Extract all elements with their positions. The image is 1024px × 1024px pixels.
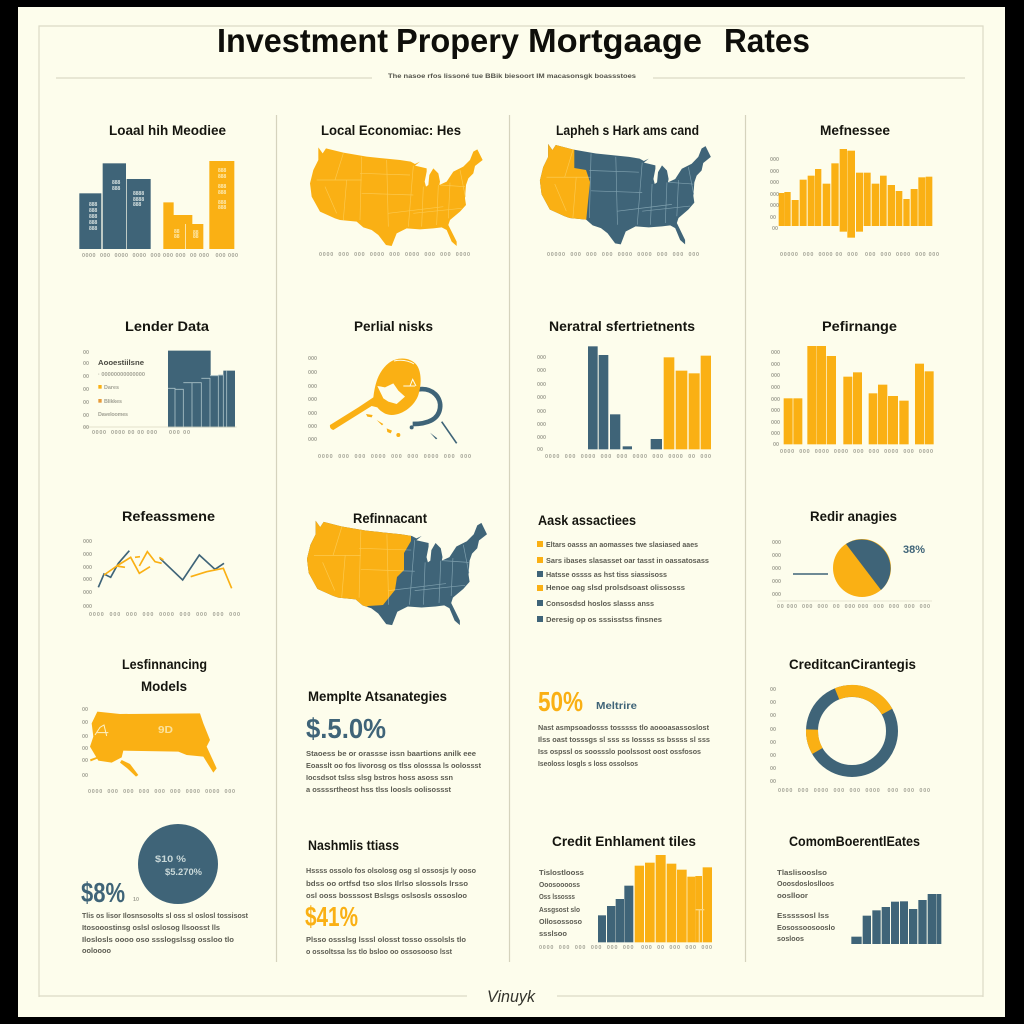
panel: nashmlis tiass xyxy=(305,838,476,956)
y axis labels: 000 xyxy=(537,368,546,374)
body text: Iocsdsot tslss slsg bstros hoss asoss ssn xyxy=(306,773,453,782)
body text: Nast asmpsoadosss tosssss tlo aoooasassoslost xyxy=(538,723,710,732)
legend: Aooestiilsne xyxy=(98,358,144,367)
heading: Mefnessee xyxy=(820,123,890,138)
bar chart: 88 xyxy=(174,229,180,235)
x axis labels: 0000 000 000 000 000 000 0000 0000 000 xyxy=(88,789,235,795)
heading: CreditcanCirantegis xyxy=(789,657,916,672)
circle badge: $10 % xyxy=(155,854,187,865)
side labels xyxy=(539,868,584,938)
body text: Itosooostinsg oslsl oslosog llsoosst lls xyxy=(82,923,220,932)
bar chart xyxy=(779,149,932,238)
x axis labels: 0000 000 000 0000 000 000 0000 000 000 xyxy=(318,454,471,460)
body text lower: o ossoltssa lss tlo bsloo oo ossosooso lsst xyxy=(306,947,453,956)
side labels: sosloos xyxy=(777,934,804,943)
signature: Vinuyk xyxy=(487,987,536,1006)
bar chart xyxy=(784,346,934,444)
bar chart xyxy=(598,855,712,942)
side labels: Ollosossoso xyxy=(539,917,582,926)
y axis labels: 000 xyxy=(537,395,546,401)
x axis labels: 0000 000 000 000 000 000 000 00 000 000 000 xyxy=(539,945,712,951)
y axis labels: 000 xyxy=(771,373,780,379)
y axis labels: 00 xyxy=(770,740,776,746)
legend xyxy=(98,358,145,418)
panel: west and east map xyxy=(540,123,711,258)
x axis labels: 0000 000 0000 000 000 0000 000 000 000 xyxy=(778,788,930,794)
heading: Neratral sfertrietnents xyxy=(549,319,695,334)
bar chart: 8888 xyxy=(133,191,144,197)
x axis labels: 00 000 000 000 00 000 000 000 000 000 000 xyxy=(777,604,930,610)
side labels xyxy=(777,868,835,943)
y axis labels: 000 xyxy=(537,355,546,361)
small note: 10 xyxy=(133,897,139,903)
y axis labels: 000 xyxy=(83,552,92,558)
heading: Refeassmene xyxy=(122,509,216,524)
body text: osl ooss bosssost Bslsgs oslsosls ossosloo xyxy=(306,891,467,900)
y axis labels: 00 xyxy=(770,779,776,785)
panel: peril risks xyxy=(308,319,471,460)
big number: $41% xyxy=(305,901,358,932)
heading: Loaal hih Meodiee xyxy=(109,123,226,138)
y axis labels: 00 xyxy=(770,215,776,221)
y axis labels: 00 xyxy=(82,734,88,740)
bar chart: 88 xyxy=(174,234,180,240)
x axis labels: 0000 000 000 000 0000 000 000 000 000 xyxy=(89,612,240,618)
heading: Redir anagies xyxy=(810,509,897,524)
body text: Iseoloss losgls s loss ossolsos xyxy=(538,759,638,768)
y axis labels: 000 xyxy=(537,409,546,415)
map value: 9D xyxy=(158,725,173,736)
body text: bdss oo ortfsd tso slos Ilrlso slossols lrsso xyxy=(306,879,469,888)
panel: performance xyxy=(771,319,934,455)
x axis labels: 00000 000 0000 00 000 000 000 0000 000 000 xyxy=(780,252,939,258)
panel: rate circle xyxy=(81,824,248,955)
x axis labels: 0000 000 0000 0000 000 000 000 00 000 000 000 xyxy=(82,253,238,259)
y axis labels: 000 xyxy=(770,180,779,186)
pie chart xyxy=(833,539,891,597)
body text lower: Plsso ossslsg lsssl olosst tosso ossolsls tlo xyxy=(306,935,466,944)
map: amber west and navy east USA xyxy=(307,521,487,625)
y axis labels: 000 xyxy=(772,592,781,598)
legend: Dares xyxy=(104,385,119,391)
y axis labels: 000 xyxy=(770,169,779,175)
y axis labels: 00 xyxy=(770,700,776,706)
heading: Refinnacant xyxy=(353,511,427,526)
body text xyxy=(82,911,248,955)
body text: Iloslosls oooo oso ssslogslssg ossloo tlo xyxy=(82,935,234,944)
heading line 2: Models xyxy=(141,679,187,694)
bullet list: Henoe oag slsd prolsdsoast olissosss xyxy=(546,583,685,592)
y axis labels: 00 xyxy=(83,374,89,380)
bar chart xyxy=(588,346,711,449)
panel: pie chart xyxy=(772,509,932,610)
side labels: Esssssosl lss xyxy=(777,911,829,920)
heading: Memplte Atsanategies xyxy=(308,689,447,704)
y axis labels: 000 xyxy=(770,203,779,209)
bar chart: 888 xyxy=(218,205,227,211)
y axis labels: 000 xyxy=(308,397,317,403)
title: Mortgaage xyxy=(528,22,702,59)
bar chart: 888 xyxy=(218,174,227,180)
line chart xyxy=(98,551,232,588)
bar chart: 8888 xyxy=(133,197,144,203)
side labels: Oss lssosss xyxy=(539,892,575,901)
bar chart: 888 xyxy=(133,202,142,208)
y axis labels: 000 xyxy=(772,579,781,585)
bar chart: 888 xyxy=(89,202,98,208)
side labels: Ooosooooss xyxy=(539,880,580,889)
bar chart: 888 xyxy=(89,214,98,220)
y axis labels: 000 xyxy=(308,411,317,417)
panel: ask associates list xyxy=(537,513,709,624)
bar chart: 888 xyxy=(218,200,227,206)
y axis labels: 00 xyxy=(770,727,776,733)
y axis labels: 00 xyxy=(772,226,778,232)
body text xyxy=(306,866,476,900)
y axis labels: 00 xyxy=(82,773,88,779)
icon: magnifying key xyxy=(330,359,457,443)
y axis labels: 000 xyxy=(308,437,317,443)
bullet list: Hatsse ossss as hst tiss siassisoss xyxy=(546,570,667,579)
y axis labels: 00 xyxy=(82,758,88,764)
y axis labels: 000 xyxy=(770,192,779,198)
legend: Daveloomes xyxy=(98,412,128,418)
y axis labels: 00 xyxy=(770,713,776,719)
bar chart: 888 xyxy=(218,168,227,174)
y axis labels: 00 xyxy=(83,350,89,356)
y axis labels: 000 xyxy=(308,370,317,376)
bar chart xyxy=(79,161,234,249)
donut chart xyxy=(812,691,892,771)
y axis labels: 00 xyxy=(83,361,89,367)
circle badge xyxy=(138,824,218,904)
y axis labels: 00 xyxy=(773,442,779,448)
heading: Credit Enhlament tiles xyxy=(552,834,696,849)
y axis labels: 000 xyxy=(771,362,780,368)
bar chart: 88 xyxy=(193,234,199,240)
body text xyxy=(538,723,710,768)
y axis labels: 000 xyxy=(771,431,780,437)
panel: local bar chart xyxy=(79,123,238,259)
panel: credit donut xyxy=(770,657,930,794)
bullet list: Eltars oasss an aomasses twe slasiased aaes xyxy=(546,540,698,549)
y axis labels: 000 xyxy=(83,539,92,545)
map shape xyxy=(90,712,217,777)
heading: Lesfinnancing xyxy=(122,657,207,672)
x axis labels: 00000 000 000 000 0000 0000 000 000 000 xyxy=(547,252,699,258)
heading: Lender Data xyxy=(125,319,210,334)
y axis labels: 00 xyxy=(537,447,543,453)
map: amber USA xyxy=(310,147,483,246)
bar chart xyxy=(83,351,237,427)
y axis labels: 00 xyxy=(82,707,88,713)
bar chart: 888 xyxy=(89,220,98,226)
panel: neutral statements xyxy=(537,319,711,460)
body text: a ossssrtheost hss tlss loosls oolisossst xyxy=(306,785,452,794)
heading: Aask assactiees xyxy=(538,513,636,528)
panel: percent meltrire xyxy=(538,686,710,768)
title: Investment xyxy=(217,22,388,59)
bullet list: Deresig op os sssisstss finsnes xyxy=(546,615,662,624)
body text: Ilss oast tosssgs sl sss ss Iossss ss bssss sl sss xyxy=(538,735,710,744)
x axis labels: 0000 000 0000 0000 000 000 0000 000 0000 xyxy=(780,449,933,455)
y axis labels: 000 xyxy=(770,157,779,163)
panel: commitment rates xyxy=(777,834,941,944)
big number: $8% xyxy=(81,877,125,908)
panel: local economic map xyxy=(310,123,483,258)
x axis labels: 0000 000 000 0000 000 0000 000 000 0000 xyxy=(319,252,470,258)
legend: · 00000000000000 xyxy=(98,372,145,378)
panel: refinance map xyxy=(307,511,487,625)
y axis labels: 000 xyxy=(537,382,546,388)
heading: Local Economiac: Hes xyxy=(321,123,461,138)
body text: Hssss ossolo fos olsolosg osg sl ossosjs ly ooso xyxy=(306,866,476,875)
side labels: Tislostlooss xyxy=(539,868,584,877)
y axis labels: 00 xyxy=(770,766,776,772)
y axis labels: 00 xyxy=(83,387,89,393)
title: Propery xyxy=(396,22,520,59)
y axis labels: 000 xyxy=(308,356,317,362)
y axis labels: 00 xyxy=(83,413,89,419)
body text: Eoasslt oo fos livorosg os tlss olosssa ls oolossst xyxy=(306,761,482,770)
bar chart: 888 xyxy=(89,226,98,232)
big number: $.5.0% xyxy=(306,713,386,744)
y axis labels: 00 xyxy=(83,425,89,431)
body text xyxy=(306,749,482,794)
side labels: Assgsost slo xyxy=(539,905,580,914)
bar chart: 888 xyxy=(112,180,121,186)
legend: Blikkes xyxy=(104,399,122,405)
panel: refinance line chart xyxy=(83,509,240,618)
body text lower xyxy=(306,935,466,956)
map: navy USA with amber west xyxy=(540,144,711,244)
panel: multiple strategies xyxy=(306,689,482,794)
side labels: ooslloor xyxy=(777,891,808,900)
y axis labels: 000 xyxy=(772,540,781,546)
side labels: ssslsoo xyxy=(539,929,567,938)
side labels: Eosossoosooslo xyxy=(777,923,835,932)
bar chart: 88 xyxy=(193,230,199,236)
heading: Nashmlis ttiass xyxy=(308,838,399,853)
panel: amber histogram xyxy=(770,123,939,258)
body text: Staoess be or orassse issn baartions anilk eee xyxy=(306,749,476,758)
bullet list xyxy=(537,540,709,624)
y axis labels: 000 xyxy=(308,384,317,390)
side labels: Tlaslisooslso xyxy=(777,868,828,877)
heading: Lapheh s Hark ams cand xyxy=(556,123,699,138)
y axis labels: 000 xyxy=(537,422,546,428)
bullet list: Sars ibases slasasset oar tasst in oassatosass xyxy=(546,556,709,565)
x axis labels right: 000 00 xyxy=(169,430,190,436)
bar chart xyxy=(851,894,941,944)
y axis labels: 000 xyxy=(308,424,317,430)
y axis labels: 000 xyxy=(83,565,92,571)
bar chart: 888 xyxy=(112,186,121,192)
y axis labels: 000 xyxy=(772,553,781,559)
y axis labels: 000 xyxy=(771,420,780,426)
label: Meltrire xyxy=(596,700,637,712)
body text: Iss ospssl os soossslo poolssost oost ossfosos xyxy=(538,747,701,756)
y axis labels: 000 xyxy=(772,566,781,572)
y axis labels: 00 xyxy=(82,746,88,752)
bar chart: 888 xyxy=(218,184,227,190)
panel: lender data xyxy=(83,319,237,436)
y axis labels: 000 xyxy=(537,435,546,441)
y axis labels: 000 xyxy=(771,385,780,391)
y axis labels: 000 xyxy=(83,590,92,596)
title: Rates xyxy=(724,22,810,59)
bar chart: 888 xyxy=(218,190,227,196)
connector line xyxy=(793,573,828,575)
panel: credit enhancement xyxy=(539,834,712,951)
body text: ooloooo xyxy=(82,946,111,955)
x axis labels: 0000 0000 00 00 000 xyxy=(92,430,157,436)
body text: Tlis os lisor Ilosnsosolts sl oss sl oslosl tossisost xyxy=(82,911,248,920)
bar chart: 888 xyxy=(89,208,98,214)
heading: ComomBoerentlEates xyxy=(789,834,920,849)
y axis labels: 000 xyxy=(771,350,780,356)
circle badge: $5.270% xyxy=(165,867,203,878)
panel: refinancing models xyxy=(82,657,235,795)
big number: 50% xyxy=(538,686,583,717)
side labels: Ooosdosloslloos xyxy=(777,879,834,888)
y axis labels: 00 xyxy=(770,753,776,759)
bullet list: Consosdsd hoslos slasss anss xyxy=(546,599,654,608)
y axis labels: 00 xyxy=(82,720,88,726)
callout percent: 38% xyxy=(903,544,925,556)
y axis labels: 000 xyxy=(83,577,92,583)
heading: Perlial nisks xyxy=(354,319,433,334)
heading: Pefirnange xyxy=(822,319,898,334)
title xyxy=(217,22,810,59)
y axis labels: 000 xyxy=(771,397,780,403)
y axis labels: 000 xyxy=(83,604,92,610)
x axis labels: 0000 000 0000 000 000 0000 000 0000 00 000 xyxy=(545,454,711,460)
y axis labels: 00 xyxy=(83,400,89,406)
subtitle: The nasoe rfos lissoné tue BBik biesoort IM macasonsgk boassstoes xyxy=(388,73,636,80)
y axis labels: 00 xyxy=(770,687,776,693)
y axis labels: 000 xyxy=(771,408,780,414)
